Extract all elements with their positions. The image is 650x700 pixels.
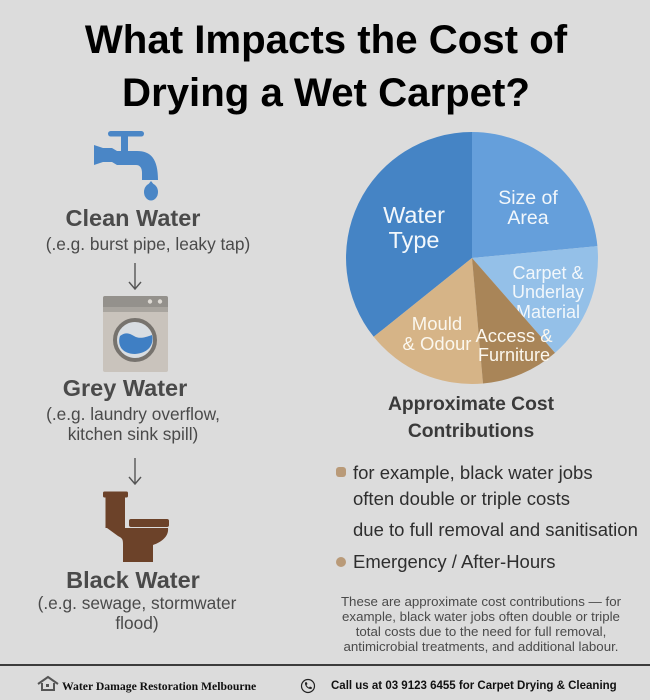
bullet text: Emergency / After-Hours xyxy=(353,551,556,572)
text: clean water examples: (.e.g. burst pipe, leaky tap) xyxy=(46,234,250,254)
slice: size of area: Size of xyxy=(498,187,558,209)
slice: mould and odour: & Odour xyxy=(403,333,471,354)
heading: grey water: Grey Water xyxy=(63,375,187,401)
slice: mould and odour: Mould xyxy=(412,313,462,334)
heading: approximate cost contributions: Contributions xyxy=(408,421,534,442)
text: cost note xyxy=(341,594,621,654)
brand name: Water Damage Restoration Melbourne xyxy=(62,680,256,693)
slice: carpet and underlay material: Material xyxy=(516,302,580,322)
slice: mould and odour xyxy=(374,258,483,384)
title xyxy=(84,17,568,115)
slice: water type xyxy=(346,132,472,337)
title: Drying a Wet Carpet? xyxy=(122,70,530,115)
slice: access and furniture: Access & xyxy=(475,325,553,346)
bullet text: for example, black water jobs xyxy=(353,462,593,483)
text: cost note: antimicrobial treatments, and additional labour. xyxy=(344,639,618,654)
text: grey water examples: (.e.g. laundry overflow, xyxy=(46,404,220,424)
slice: size of area xyxy=(472,132,597,258)
heading: approximate cost contributions: Approximate Cost xyxy=(388,394,554,415)
call to action: Call us at 03 9123 6455 for Carpet Drying & Cleaning xyxy=(331,680,617,692)
bullet xyxy=(336,557,346,567)
bullet text: often double or triple costs xyxy=(353,488,570,508)
slice: access and furniture: Furniture xyxy=(478,345,550,365)
slice: access and furniture xyxy=(472,258,555,384)
icon: phone xyxy=(300,678,316,694)
icon: house logo xyxy=(38,676,58,691)
slice: carpet and underlay material xyxy=(472,246,598,353)
bullet text xyxy=(353,462,593,509)
text: black water examples: flood) xyxy=(115,613,159,633)
legend item: emergency xyxy=(336,551,556,572)
text: black water examples xyxy=(38,593,236,633)
legend item: black water note xyxy=(336,462,638,540)
text: black water examples: (.e.g. sewage, stormwater xyxy=(38,593,236,613)
title: What Impacts the Cost of xyxy=(85,17,567,62)
text: grey water examples: kitchen sink spill) xyxy=(68,424,198,444)
heading: black water: Black Water xyxy=(66,567,200,593)
text: cost note: These are approximate cost contributions — for xyxy=(341,594,621,609)
text: cost note: example, black water jobs often double or triple xyxy=(342,609,620,624)
slice: water type: Type xyxy=(389,227,439,253)
heading: approximate cost contributions xyxy=(388,394,554,442)
text: cost note: total costs due to the need for full removal, xyxy=(356,624,606,639)
slice: size of area: Area xyxy=(507,207,549,229)
bullet xyxy=(336,467,346,477)
slice: water type: Water xyxy=(383,202,445,228)
footer xyxy=(0,664,650,700)
heading: clean water: Clean Water xyxy=(66,205,200,231)
continuation text: due to full removal and sanitisation xyxy=(353,519,638,540)
slice: carpet and underlay material: Underlay xyxy=(512,282,584,302)
slice: carpet and underlay material: Carpet & xyxy=(512,263,584,283)
text: grey water examples xyxy=(46,404,220,444)
